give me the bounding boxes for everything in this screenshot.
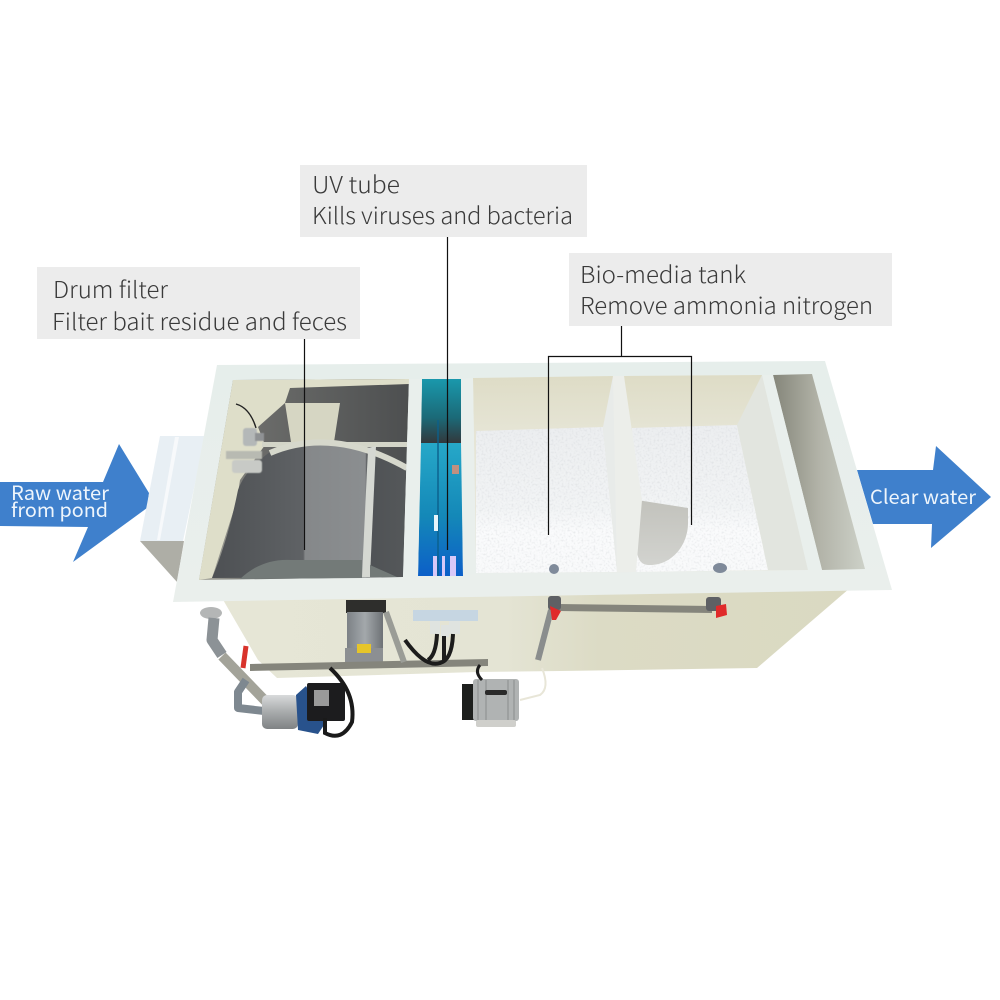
diagonal pipe bbox=[386, 612, 404, 662]
label: bio-media tank: Bio-media tank bbox=[580, 256, 746, 290]
UV sticker bbox=[413, 610, 478, 621]
arrow: raw water from pond: Raw water bbox=[11, 477, 109, 506]
pointer: drum filter bbox=[304, 339, 306, 550]
bio-media compartment 2 bbox=[624, 375, 808, 572]
pipe knobs bbox=[549, 563, 727, 574]
label: drum filter: Drum filter bbox=[53, 271, 169, 305]
tank body bbox=[222, 588, 850, 678]
water pump bbox=[262, 668, 353, 736]
UV tube compartment bbox=[418, 379, 463, 576]
arrow: clear water bbox=[857, 446, 991, 548]
label: drum filter: Filter bait residue and feces bbox=[52, 303, 347, 337]
bio-media compartment 1 bbox=[473, 376, 636, 573]
pointer: bio-media bracket bbox=[548, 326, 692, 535]
label: bio-media tank bbox=[569, 253, 892, 326]
arrow: raw water from pond bbox=[0, 444, 149, 562]
label: UV tube bbox=[300, 165, 587, 237]
arrow: raw water from pond: from pond bbox=[11, 494, 108, 523]
overflow slot bbox=[636, 500, 688, 565]
tank rim bbox=[173, 361, 892, 602]
horizontal drain pipe bbox=[250, 659, 488, 671]
partition wall bbox=[613, 376, 642, 572]
red hose bbox=[243, 646, 246, 668]
rim inner dividers bbox=[403, 375, 822, 577]
pointer: UV tube bbox=[446, 237, 448, 550]
label: drum filter bbox=[37, 267, 360, 339]
drum filter compartment bbox=[199, 379, 409, 580]
label: UV tube: Kills viruses and bacteria bbox=[312, 197, 573, 231]
UV connectors and cables bbox=[405, 621, 460, 664]
air pump bbox=[462, 665, 546, 727]
label: bio-media tank: Remove ammonia nitrogen bbox=[580, 287, 873, 321]
spray fittings bbox=[226, 428, 264, 473]
inlet box bbox=[140, 436, 205, 582]
aeration pipe and valves bbox=[538, 596, 727, 660]
drive motor bbox=[345, 600, 386, 664]
inlet elbow and pipes bbox=[200, 607, 276, 712]
filter tank photo bbox=[140, 361, 892, 736]
outlet compartment bbox=[773, 374, 865, 570]
arrow: clear water: Clear water bbox=[870, 481, 976, 510]
label: UV tube: UV tube bbox=[312, 166, 400, 200]
